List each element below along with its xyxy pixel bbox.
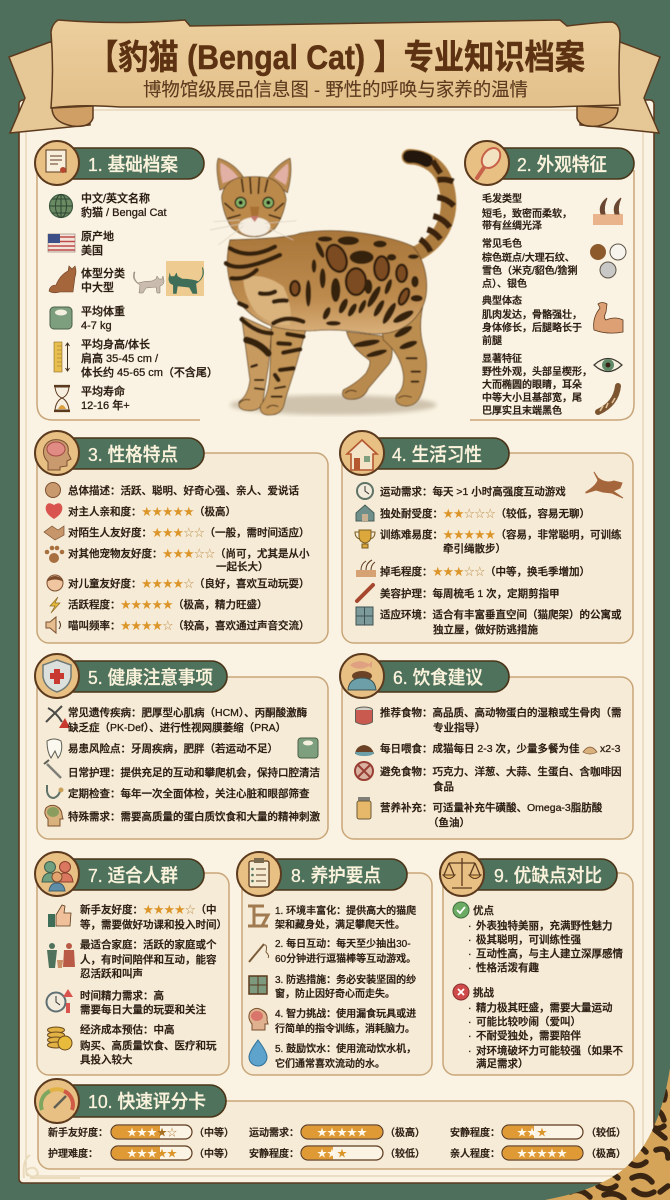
pros list: 互动性高，与主人建立深厚感情 bbox=[476, 947, 623, 960]
personality rows: 活跃程度：★★★★★（极高，精力旺盛） bbox=[68, 598, 268, 611]
lifespan item: 12-16 年+ bbox=[81, 398, 130, 412]
lifespan item: 平均寿命 bbox=[81, 384, 125, 398]
score bars: （极高） bbox=[385, 1126, 425, 1139]
panel 10: quick score card bbox=[35, 1079, 634, 1169]
panel 7: suitable owners bbox=[35, 852, 229, 1075]
weight item: 平均体重 bbox=[81, 304, 125, 318]
cons list: · bbox=[468, 1002, 472, 1014]
pros list: · bbox=[468, 920, 472, 932]
lifestyle rows: 掉毛程度：★★★☆☆（中等，换毛季增加） bbox=[380, 565, 590, 578]
heading 1: 1. 基础档案 bbox=[88, 154, 178, 175]
heading 10 bbox=[35, 1079, 226, 1123]
score bars: 运动需求： bbox=[249, 1127, 299, 1139]
origin item: 原产地 bbox=[81, 229, 114, 243]
height item bbox=[54, 337, 218, 379]
care rows: 3. 防逃措施：务必安装坚固的纱 bbox=[275, 973, 416, 986]
score bars: 护理难度： bbox=[48, 1147, 98, 1160]
flourish bbox=[24, 1155, 80, 1178]
cons list: 对环境破坏力可能较强（如果不 bbox=[476, 1044, 623, 1057]
suitable rows: 需要每日大量的玩耍和关注 bbox=[80, 1003, 206, 1016]
coat colour item: 雪色（米克/貂色/猞猁 bbox=[482, 264, 578, 277]
suitable rows: 等，需要做好功课和投入时间） bbox=[80, 918, 227, 931]
running cat icon bbox=[586, 472, 623, 498]
care rows: 行简单的指令训练，消耗脑力。 bbox=[275, 1022, 415, 1035]
main title: 【豹猫 (Bengal Cat) 】专业知识档案 bbox=[88, 39, 585, 77]
lifestyle rows: 独处耐受度：★★☆☆☆（较低，容易无聊） bbox=[380, 507, 590, 520]
name item bbox=[50, 191, 167, 219]
body type item: 中大型 bbox=[81, 280, 114, 294]
pros list: 外表独特美丽，充满野性魅力 bbox=[476, 919, 612, 932]
personality rows: 一起长大） bbox=[216, 560, 268, 573]
origin item bbox=[48, 229, 114, 257]
score bars: （较低） bbox=[385, 1147, 425, 1160]
panel 1: basic profile bbox=[35, 141, 218, 420]
leopard print corner bbox=[545, 1068, 670, 1200]
health rows bbox=[44, 706, 320, 826]
subtitle: 博物馆级展品信息图 - 野性的呼唤与家养的温情 bbox=[143, 79, 528, 100]
personality rows: 喵叫频率：★★★★☆（较高，喜欢通过声音交流） bbox=[68, 619, 310, 632]
diet rows: x2-3 bbox=[600, 743, 621, 755]
cons list: 可能比较吵闹（爱叫） bbox=[476, 1015, 581, 1028]
score bars: ★★★★★ bbox=[517, 1149, 567, 1160]
notable features item: 大而椭圆的眼睛，耳朵 bbox=[482, 378, 582, 391]
personality rows: 对陌生人友好度：★★★☆☆（一般，需时间适应） bbox=[68, 526, 310, 539]
score bars: 亲人程度： bbox=[450, 1147, 500, 1160]
suitable rows: 最适合家庭：活跃的家庭或个 bbox=[80, 938, 217, 951]
personality rows: 总体描述：活跃、聪明、好奇心强、亲人、爱说话 bbox=[68, 484, 299, 497]
body type item bbox=[49, 261, 204, 296]
heading 9: 9. 优缺点对比 bbox=[494, 865, 602, 886]
coat colour item: 点）、银色 bbox=[482, 277, 527, 290]
score bars: 安静程度： bbox=[450, 1126, 500, 1139]
name item: 中文/英文名称 bbox=[81, 191, 150, 205]
panel 5: health bbox=[35, 654, 328, 839]
care rows: 窗，防止因好奇心而走失。 bbox=[275, 987, 395, 1000]
diet rows: 每日喂食：成猫每日 2-3 次，少量多餐为佳 bbox=[380, 742, 580, 755]
score bars: 新手友好度： bbox=[48, 1126, 108, 1139]
notable features item: 巴厚实且末端黑色 bbox=[482, 404, 562, 417]
hair type item: 带有丝绸光泽 bbox=[482, 219, 542, 232]
pros list bbox=[453, 902, 623, 974]
coat colour item: 常见毛色 bbox=[482, 237, 522, 250]
score bars: ★★★★☆ bbox=[127, 1127, 177, 1139]
suitable rows: 时间精力需求：高 bbox=[80, 989, 164, 1002]
panel 6: diet bbox=[340, 654, 633, 839]
cons list: 精力极其旺盛，需要大量运动 bbox=[476, 1001, 612, 1014]
diet rows: 避免食物：巧克力、洋葱、大蒜、生蛋白、含咖啡因 bbox=[380, 765, 622, 778]
care rows bbox=[248, 904, 416, 1070]
diet rows: 营养补充：可适量补充牛磺酸、Omega-3脂肪酸 bbox=[380, 801, 603, 814]
heading 7: 7. 适合人群 bbox=[88, 865, 178, 886]
health rows: 定期检查：每年一次全面体检，关注心脏和眼部筛查 bbox=[68, 787, 310, 800]
health rows: 常见遗传疾病：肥厚型心肌病（HCM）、丙酮酸激酶 bbox=[68, 706, 308, 719]
lifestyle rows: 适应环境：适合有丰富垂直空间（猫爬架）的公寓或 bbox=[380, 608, 622, 621]
score bars: 安静程度： bbox=[249, 1147, 299, 1160]
personality rows: 对主人亲和度：★★★★★（极高） bbox=[68, 505, 236, 518]
care rows: 5. 鼓励饮水：使用流动饮水机， bbox=[275, 1042, 416, 1055]
body type item: 体型分类 bbox=[81, 266, 125, 280]
heading 8 bbox=[237, 852, 407, 896]
hair type item: 短毛，致密而柔软， bbox=[482, 207, 572, 220]
score bars: ★★★ bbox=[517, 1128, 547, 1139]
lifestyle rows: 运动需求：每天 >1 小时高强度互动游戏 bbox=[380, 485, 566, 498]
care rows: 2. 每日互动：每天至少抽出30- bbox=[275, 937, 411, 950]
notable features item: 中等大小且基部宽，尾 bbox=[482, 391, 582, 404]
score bars: ★★★★★ bbox=[127, 1149, 177, 1160]
title banner bbox=[9, 20, 660, 133]
suitable rows: 购买、高质量饮食、医疗和玩 bbox=[80, 1039, 217, 1052]
lifestyle rows: 美容护理：每周梳毛 1 次，定期剪指甲 bbox=[380, 587, 560, 600]
lifestyle rows: 牵引绳散步） bbox=[443, 542, 506, 555]
suitable rows: 新手友好度：★★★★☆（中 bbox=[80, 903, 216, 916]
height item: 肩高 35-45 cm / bbox=[81, 351, 159, 365]
cons list: · bbox=[468, 1016, 472, 1028]
diet rows: 专业指导） bbox=[433, 721, 486, 734]
heading 3 bbox=[35, 431, 204, 475]
heading 2: 2. 外观特征 bbox=[517, 154, 607, 175]
heading 5 bbox=[35, 654, 227, 698]
heading 2 bbox=[465, 141, 634, 185]
cons list: 满足需求） bbox=[476, 1057, 528, 1070]
height item: 体长约 45-65 cm（不含尾） bbox=[81, 365, 218, 379]
heading 4 bbox=[340, 431, 509, 475]
care rows: 架和藏身处，满足攀爬天性。 bbox=[275, 918, 405, 931]
body form item: 肌肉发达，骨骼强壮， bbox=[482, 308, 582, 321]
lifestyle rows bbox=[355, 483, 622, 636]
pros list: 性格活泼有趣 bbox=[476, 961, 539, 974]
personality rows bbox=[44, 482, 310, 633]
diet rows: （鱼油） bbox=[428, 816, 470, 829]
suitable rows: 忍活跃和叫声 bbox=[80, 967, 143, 980]
health rows: 缺乏症（PK-Def）、进行性视网膜萎缩（PRA） bbox=[68, 721, 286, 734]
hair type item bbox=[482, 192, 623, 232]
cons list: 不耐受独处，需要陪伴 bbox=[476, 1029, 581, 1042]
bengal cat illustration bbox=[210, 157, 454, 415]
cons list bbox=[453, 984, 623, 1070]
personality rows: 对其他宠物友好度：★★★☆☆（尚可，尤其是从小 bbox=[68, 547, 310, 560]
heading 4: 4. 生活习性 bbox=[392, 444, 482, 465]
name item: 豹猫 / Bengal Cat bbox=[81, 205, 167, 219]
score bars: ★★★★★ bbox=[317, 1128, 367, 1139]
suitable rows: 人，有时间陪伴和互动，能容 bbox=[80, 953, 217, 966]
body form item: 身体修长，后腿略长于 bbox=[482, 321, 582, 334]
coat colour item bbox=[482, 237, 626, 290]
diet rows: 推荐食物：高品质、高动物蛋白的湿粮或生骨肉（需 bbox=[380, 706, 622, 719]
score bars: （较低） bbox=[586, 1126, 626, 1139]
lifespan item bbox=[54, 384, 130, 412]
diet rows: 食品 bbox=[433, 780, 454, 793]
personality rows: 对儿童友好度：★★★★☆（良好，喜欢互动玩耍） bbox=[68, 577, 310, 590]
lifestyle rows: 独立屋，做好防逃措施 bbox=[433, 623, 538, 636]
notable features item bbox=[482, 352, 622, 417]
health rows: 特殊需求：需要高质量的蛋白质饮食和大量的精神刺激 bbox=[68, 810, 320, 823]
body form item bbox=[482, 294, 623, 347]
score bars: （极高） bbox=[586, 1147, 626, 1160]
heading 5: 5. 健康注意事项 bbox=[88, 667, 213, 688]
heading 1 bbox=[35, 141, 204, 185]
panel 9: pros and cons bbox=[440, 852, 633, 1075]
small and medium cats bbox=[133, 261, 204, 296]
score bars: ★★★ bbox=[317, 1149, 347, 1160]
lifestyle rows: 训练难易度：★★★★★（容易，非常聪明，可训练 bbox=[380, 528, 622, 541]
body form item: 典型体态 bbox=[482, 294, 522, 307]
scale icon bbox=[298, 738, 318, 758]
cons list: · bbox=[468, 1030, 472, 1042]
heading 6: 6. 饮食建议 bbox=[393, 667, 483, 688]
care rows: 1. 环境丰富化：提供高大的猫爬 bbox=[275, 904, 416, 917]
care rows: 它们通常喜欢流动的水。 bbox=[275, 1057, 385, 1070]
suitable rows: 经济成本预估：中高 bbox=[80, 1023, 174, 1036]
weight item: 4-7 kg bbox=[81, 320, 112, 332]
heading 9 bbox=[440, 852, 617, 896]
pros list: 极其聪明，可训练性强 bbox=[476, 933, 581, 946]
pros list: 优点 bbox=[473, 904, 494, 917]
height item: 平均身高/体长 bbox=[81, 337, 150, 351]
heading 7 bbox=[35, 852, 204, 896]
coat colour item: 棕色斑点/大理石纹、 bbox=[482, 251, 575, 264]
panel 8: care points bbox=[237, 852, 432, 1075]
panel 3: personality bbox=[35, 431, 328, 643]
health rows: 日常护理：提供充足的互动和攀爬机会，保持口腔清洁 bbox=[68, 766, 320, 779]
heading 3: 3. 性格特点 bbox=[88, 444, 178, 465]
pros list: · bbox=[468, 934, 472, 946]
hair type item: 毛发类型 bbox=[482, 192, 522, 205]
heading 10: 10. 快速评分卡 bbox=[88, 1091, 206, 1112]
cons list: 挑战 bbox=[473, 986, 494, 999]
pros list: · bbox=[468, 962, 472, 974]
diet rows bbox=[355, 706, 622, 829]
weight item bbox=[50, 304, 125, 332]
suitable rows: 具投入较大 bbox=[80, 1053, 133, 1066]
heading 6 bbox=[340, 654, 509, 698]
score bars bbox=[48, 1125, 626, 1160]
score bars: （中等） bbox=[194, 1147, 234, 1160]
score bars: （中等） bbox=[194, 1126, 234, 1139]
suitable rows bbox=[46, 903, 227, 1066]
pros list: · bbox=[468, 948, 472, 960]
panel 2: appearance bbox=[465, 141, 634, 420]
body form item: 前腿 bbox=[482, 334, 502, 347]
care rows: 60分钟进行逗猫棒等互动游戏。 bbox=[275, 952, 416, 965]
cons list: · bbox=[468, 1045, 472, 1057]
origin item: 美国 bbox=[81, 243, 103, 257]
notable features item: 显著特征 bbox=[482, 352, 522, 365]
health rows: 易患风险点：牙周疾病，肥胖（若运动不足） bbox=[68, 742, 278, 755]
heading 8: 8. 养护要点 bbox=[291, 865, 381, 886]
notable features item: 野性外观，头部呈楔形， bbox=[482, 365, 592, 378]
panel 4: lifestyle bbox=[340, 431, 633, 643]
care rows: 4. 智力挑战：使用漏食玩具或进 bbox=[275, 1007, 416, 1020]
